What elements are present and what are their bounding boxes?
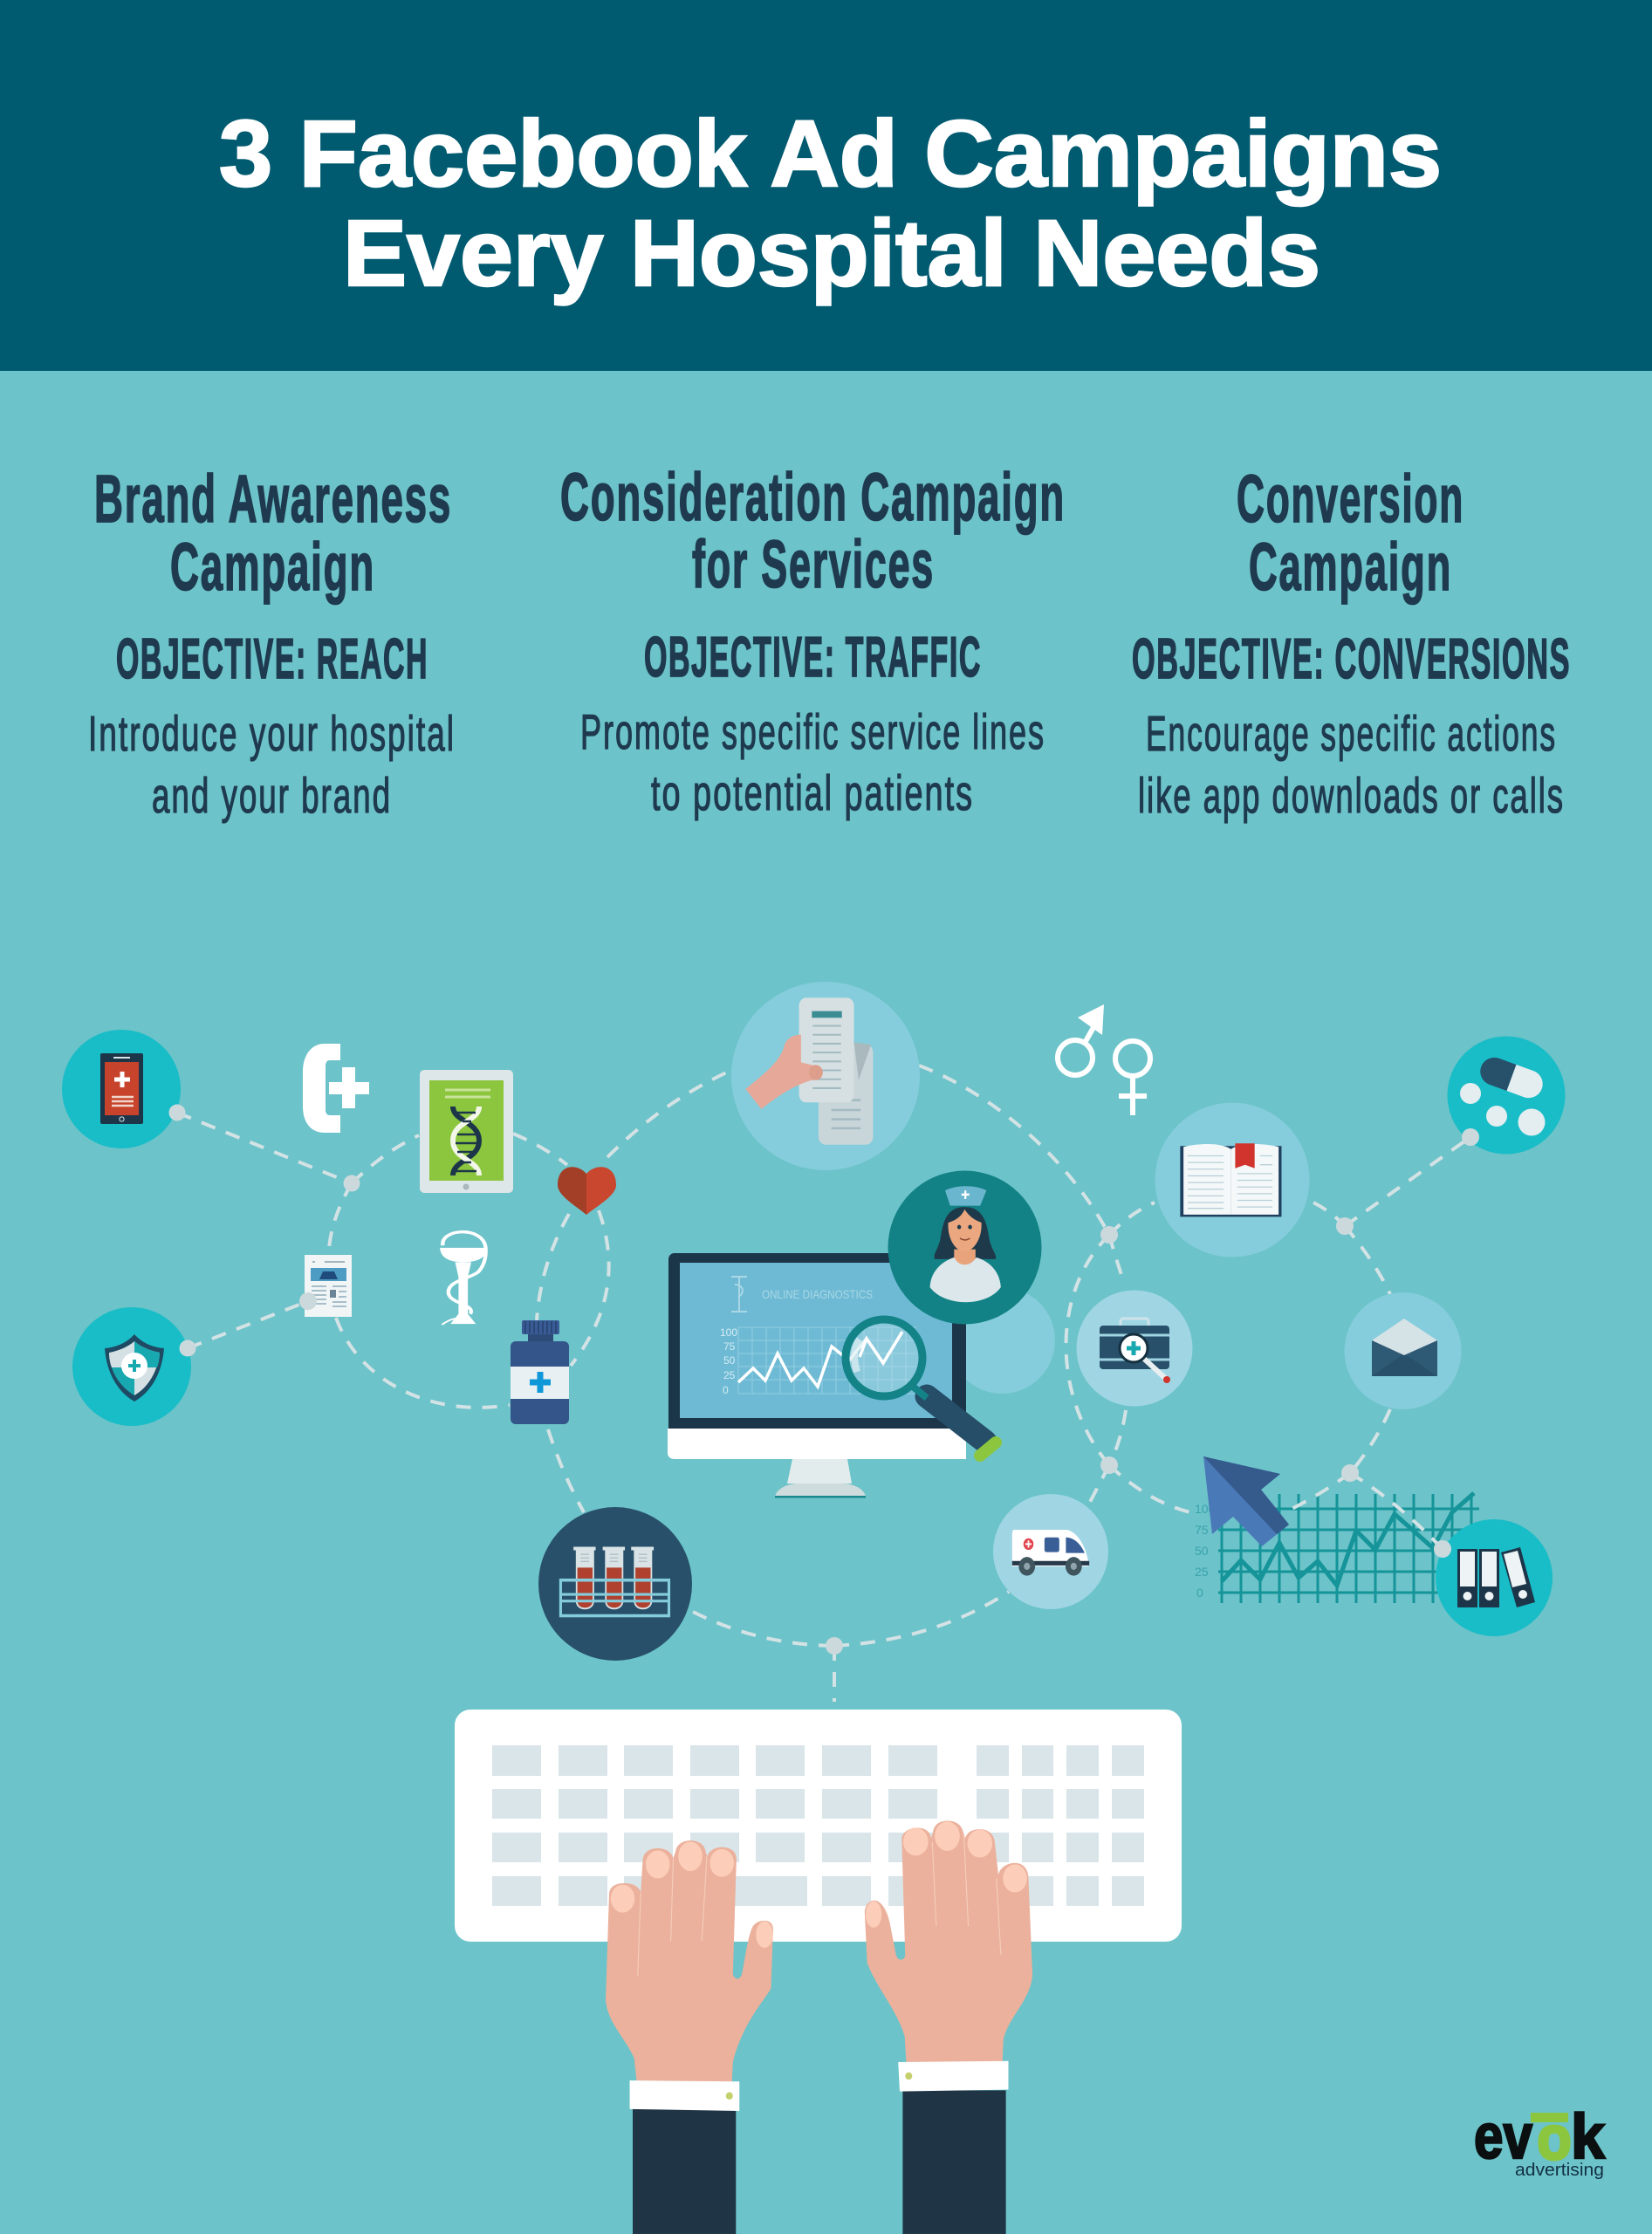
icon: computer monitor with chart bbox=[668, 1253, 966, 1497]
icon: hand holding documents bbox=[731, 982, 920, 1170]
panel: brand awareness campaign: OBJECTIVE: REACH bbox=[116, 627, 428, 690]
icon: nurse bbox=[888, 1171, 1042, 1325]
panel: brand awareness campaign: Brand Awareness bbox=[94, 462, 452, 537]
title: Every Hospital Needs bbox=[343, 200, 1320, 305]
line chart: bottom right: 75 bbox=[1195, 1523, 1209, 1537]
icon: newspaper bbox=[305, 1255, 352, 1317]
dashed connector network bbox=[177, 1066, 1470, 1702]
icon: ambulance bbox=[993, 1494, 1108, 1609]
panel: consideration campaign: to potential patients bbox=[651, 765, 974, 821]
line chart: bottom right: 0 bbox=[1196, 1586, 1203, 1600]
icon: cursor arrow bbox=[1203, 1456, 1289, 1546]
panel: brand awareness campaign: Introduce your hospital bbox=[88, 706, 456, 762]
logo: evok advertising: o bbox=[1539, 2106, 1570, 2170]
right hand bbox=[865, 1820, 1032, 2234]
panel: consideration campaign: Promote specific service lines bbox=[580, 704, 1045, 760]
icon: white telephone plus bbox=[303, 1044, 369, 1133]
title: 3 Facebook Ad Campaigns bbox=[219, 100, 1442, 206]
icon: computer monitor with chart: 100 bbox=[720, 1326, 737, 1339]
icon: heart bbox=[558, 1167, 616, 1215]
panel: consideration campaign bbox=[560, 460, 1066, 821]
icon: medical briefcase bbox=[1077, 1290, 1192, 1407]
icon: light circle behind monitor bbox=[949, 1287, 1055, 1394]
icon: test tubes bbox=[538, 1507, 692, 1661]
header banner bbox=[0, 0, 1652, 371]
panel: brand awareness campaign: and your brand bbox=[152, 768, 392, 824]
line chart: bottom right: 25 bbox=[1195, 1565, 1209, 1579]
icon: male and female symbols bbox=[1058, 1004, 1150, 1115]
title bbox=[219, 100, 1442, 305]
icon: open book bbox=[1155, 1103, 1309, 1257]
logo: evok advertising: k bbox=[1571, 2102, 1606, 2172]
icon: computer monitor with chart: 75 bbox=[723, 1340, 736, 1353]
small caduceus on screen bbox=[731, 1277, 747, 1312]
keyboard bbox=[455, 1710, 1182, 1942]
panel: brand awareness campaign: Campaign bbox=[170, 530, 375, 605]
icon: envelope bbox=[1344, 1292, 1461, 1409]
left hand bbox=[606, 1840, 773, 2234]
icon: pills bbox=[1447, 1037, 1566, 1154]
panel: consideration campaign: OBJECTIVE: TRAFFIC bbox=[644, 625, 982, 689]
line chart: bottom right bbox=[1195, 1493, 1479, 1603]
icon: caduceus bbox=[440, 1232, 487, 1325]
icon: phone in circle bbox=[62, 1030, 181, 1148]
icon: computer monitor with chart: 25 bbox=[723, 1369, 736, 1381]
icon: binders bbox=[1436, 1519, 1553, 1636]
connector nodes bbox=[169, 1105, 1479, 1655]
icon: shield in circle bbox=[72, 1307, 191, 1426]
panel: consideration campaign: for Services bbox=[692, 527, 935, 602]
panel: brand awareness campaign bbox=[88, 462, 456, 824]
line chart: bottom right: 50 bbox=[1195, 1544, 1209, 1558]
panel: conversion campaign bbox=[1132, 462, 1571, 824]
logo: evok advertising bbox=[1474, 2102, 1606, 2180]
logo: evok advertising: ev bbox=[1474, 2102, 1532, 2172]
icon: pill bottle bbox=[511, 1320, 569, 1424]
line chart: bottom right: 100 bbox=[1195, 1502, 1216, 1516]
panel: conversion campaign: Campaign bbox=[1249, 530, 1452, 605]
screen label: ONLINE DIAGNOSTICS bbox=[762, 1287, 873, 1301]
icon: computer monitor with chart: 0 bbox=[723, 1384, 729, 1396]
icon: tablet with DNA bbox=[420, 1070, 513, 1193]
logo: evok advertising: advertising bbox=[1515, 2161, 1604, 2180]
panel: consideration campaign: Consideration Campaign bbox=[560, 460, 1066, 535]
icon: computer monitor with chart: 50 bbox=[723, 1354, 736, 1367]
icon: magnifying glass bbox=[846, 1319, 996, 1456]
panel: conversion campaign: Conversion bbox=[1237, 462, 1464, 537]
